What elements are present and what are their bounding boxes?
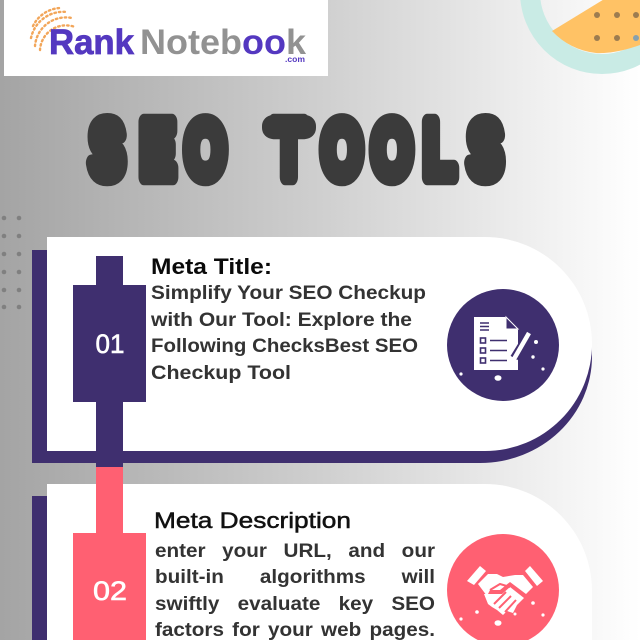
decoration: top-right ring and orange half disc [530, 0, 640, 64]
logo wordmark: Rank [49, 23, 135, 62]
logo wordmark: .com [285, 55, 305, 64]
left dot grid [2, 216, 21, 309]
text block: Meta Description line group: built-in algorithms will [155, 566, 435, 588]
step 02 marker [73, 467, 146, 640]
text block: Meta Title description [150, 282, 426, 384]
heading: Meta Title: Meta Title: [151, 254, 272, 279]
text block: Meta Description line group [155, 540, 435, 640]
text block: Meta Title description: Following ChecksBest SEO [151, 335, 418, 357]
title: TOOLS [273, 106, 503, 195]
logo panel [4, 0, 328, 76]
panel: card 01 [32, 237, 592, 463]
logo wordmark [49, 23, 307, 64]
step 02 marker: 02 [93, 576, 127, 606]
text block: Meta Title description: with Our Tool: Explore the [150, 309, 412, 331]
panel: card 02 [32, 484, 592, 640]
title: SEO [90, 106, 226, 195]
icon: document checklist [447, 289, 559, 401]
text block: Meta Description line group: swiftly evaluate key SEO [155, 592, 435, 614]
text block: Meta Title description: Checkup Tool [151, 362, 291, 384]
step 01 marker: 01 [96, 329, 124, 359]
heading: Meta Description: Meta Description [154, 508, 351, 533]
text block: Meta Description line group: enter your URL, and our [155, 540, 435, 562]
icon: handshake [447, 534, 559, 640]
title [90, 106, 503, 195]
text block: Meta Title description: Simplify Your SEO Checkup [151, 282, 426, 304]
logo sunburst dots [31, 8, 75, 50]
logo wordmark: Notebook [140, 23, 307, 62]
step 01 marker [73, 256, 146, 468]
